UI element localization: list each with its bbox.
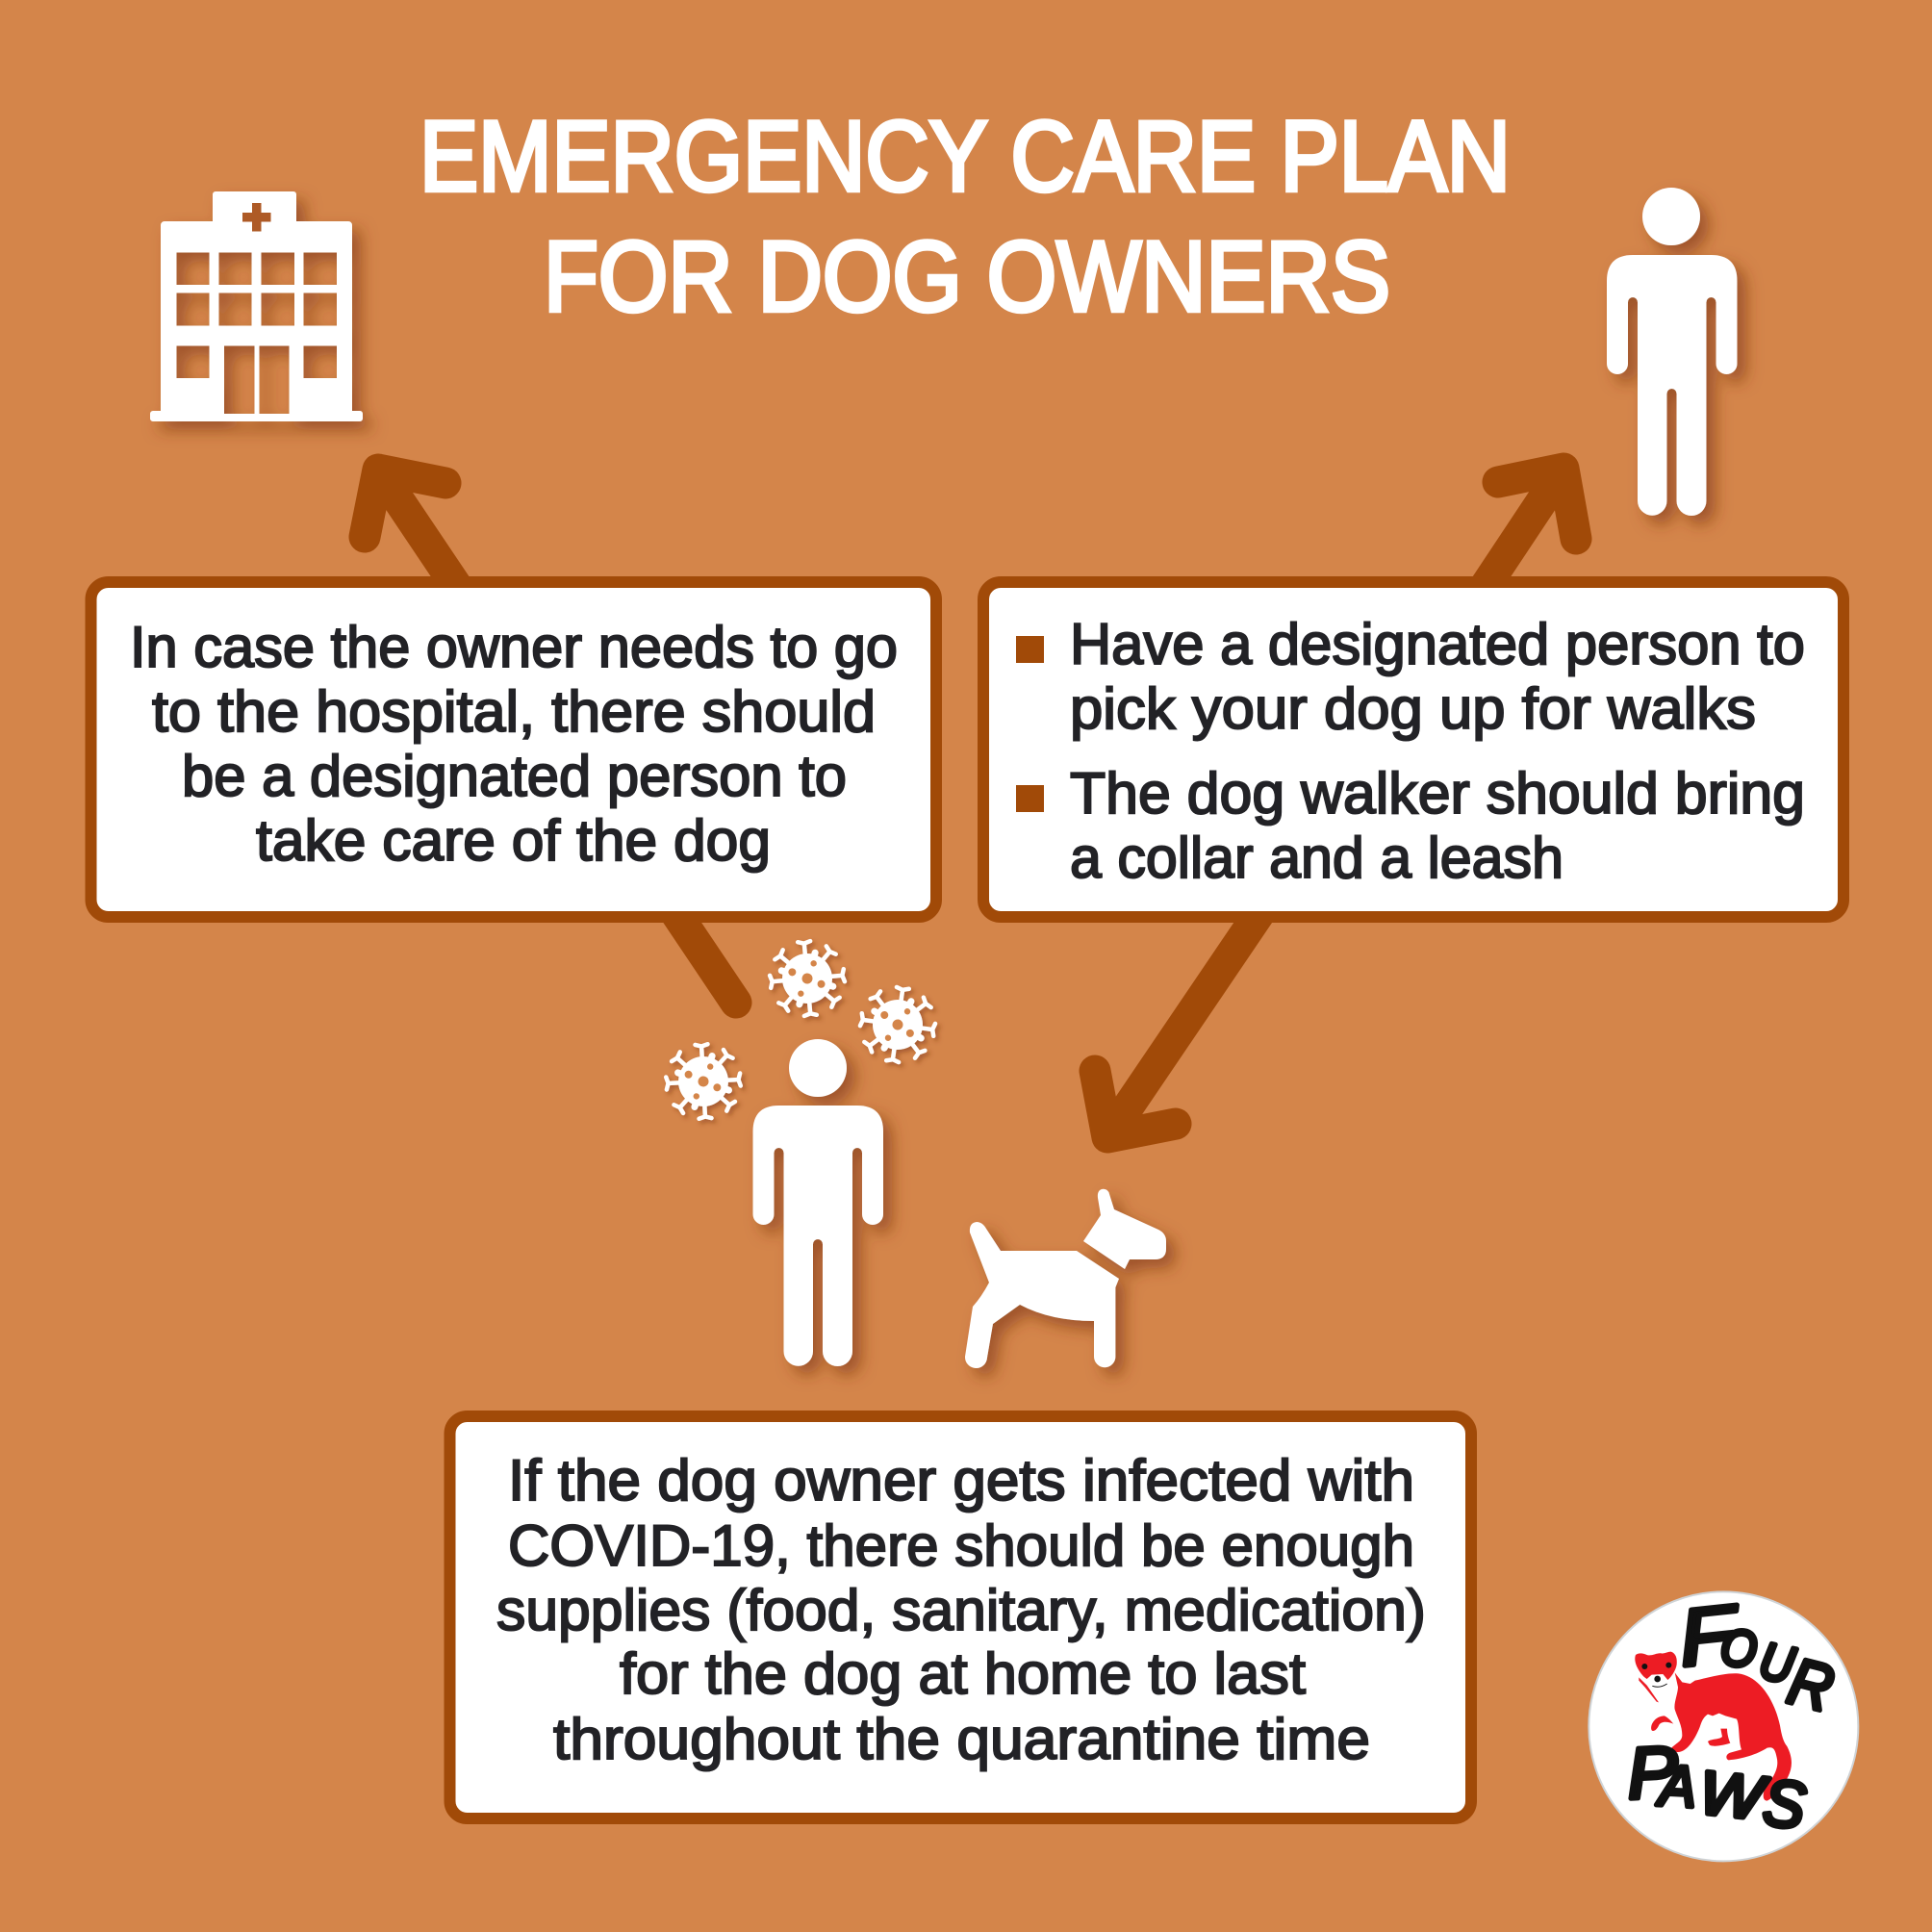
- bullet two: [1016, 785, 1044, 812]
- title: FOR DOG OWNERS: [544, 221, 1390, 333]
- panel: hospital plan: [90, 582, 936, 917]
- logo: Four Paws badge: [1589, 1589, 1858, 1861]
- arrow: box to designated person: [1472, 469, 1576, 606]
- text: dog walking plan: Have a designated person to: [1070, 612, 1805, 676]
- text: dog walking plan: a collar and a leash: [1070, 826, 1563, 890]
- text: hospital plan: to the hospital, there should: [152, 679, 876, 744]
- icon: infected owner: [752, 1039, 883, 1366]
- text: supplies plan: [496, 1448, 1426, 1771]
- text: hospital plan: be a designated person to: [182, 744, 847, 808]
- bullet one: [1016, 636, 1044, 663]
- text: hospital plan: In case the owner needs to go: [130, 615, 898, 679]
- text: supplies plan: supplies (food, sanitary, medication): [496, 1578, 1426, 1642]
- logo: wordmark: U: [1755, 1631, 1799, 1694]
- logo: wordmark: F: [1675, 1589, 1745, 1684]
- icon: designated person: [1607, 188, 1738, 516]
- text: hospital plan: [130, 615, 898, 873]
- logo: wordmark: S: [1760, 1767, 1809, 1843]
- logo: wordmark: [1625, 1589, 1841, 1843]
- logo: wordmark: A: [1655, 1754, 1698, 1819]
- text: supplies plan: COVID-19, there should be enough: [508, 1513, 1414, 1578]
- text: dog walking plan: [1070, 612, 1805, 890]
- icon: dog: [965, 1189, 1166, 1368]
- arrow: owner to hospital: [365, 470, 736, 1003]
- icon: virus cluster: [665, 938, 939, 1120]
- text: supplies plan: throughout the quarantine time: [553, 1707, 1370, 1771]
- text: hospital plan: take care of the dog: [256, 808, 771, 873]
- text: supplies plan: If the dog owner gets infected with: [508, 1448, 1414, 1513]
- text: supplies plan: for the dog at home to last: [620, 1641, 1306, 1706]
- logo: wordmark: W: [1696, 1759, 1772, 1834]
- logo: wordmark: P: [1625, 1731, 1680, 1815]
- logo: red marten: [1635, 1652, 1792, 1801]
- icon: hospital: [150, 191, 363, 421]
- title: EMERGENCY CARE PLAN: [419, 101, 1511, 213]
- icon: hospital cross: [242, 203, 271, 231]
- logo: wordmark: R: [1781, 1643, 1841, 1725]
- logo: wordmark: O: [1717, 1617, 1760, 1679]
- panel: supplies plan: [450, 1416, 1471, 1818]
- arrow: box to dog: [1095, 904, 1265, 1137]
- title: [419, 101, 1511, 333]
- panel: dog walking plan: [983, 582, 1843, 917]
- text: dog walking plan: The dog walker should bring: [1070, 761, 1805, 826]
- text: dog walking plan: pick your dog up for walks: [1070, 676, 1756, 741]
- logo: marten face: [1641, 1663, 1671, 1687]
